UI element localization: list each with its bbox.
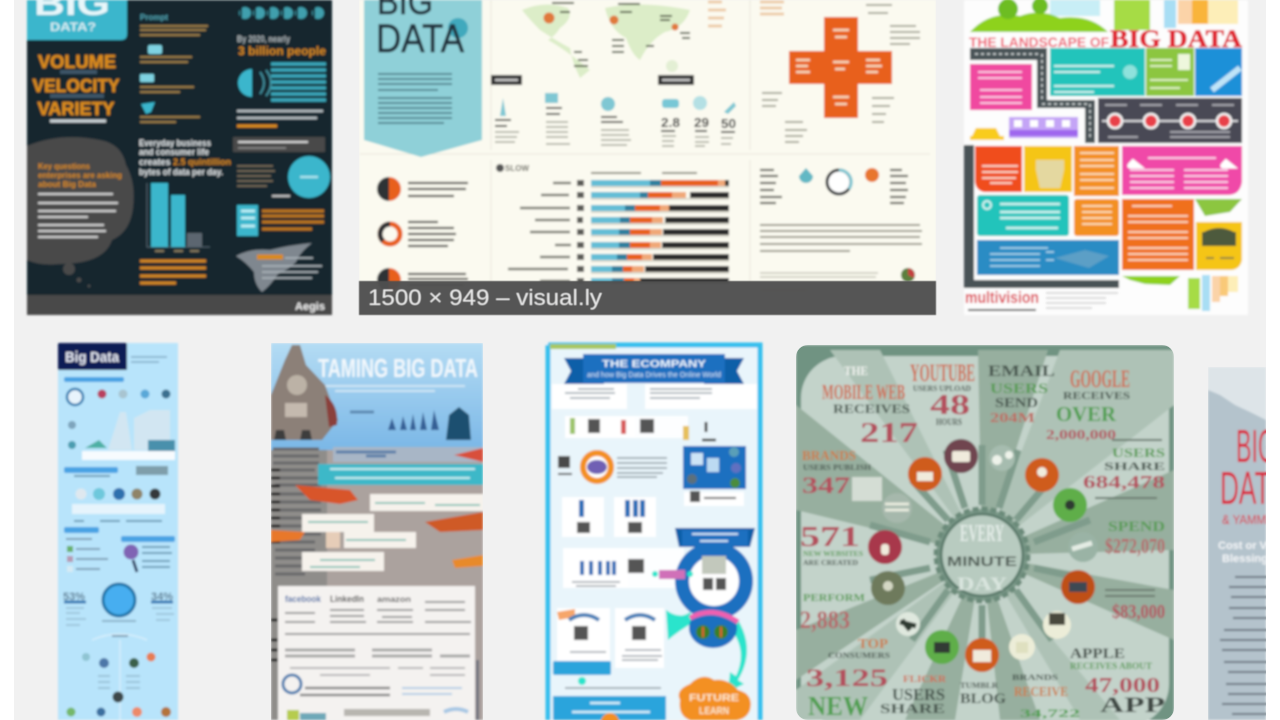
- text block: [760, 225, 922, 290]
- left statistics: USERS PUBLISH: [803, 463, 872, 472]
- orange cloud: future learn: FUTURE: [689, 693, 739, 704]
- circular icons around centre: [852, 439, 1098, 672]
- top statistics: SEND: [995, 396, 1038, 411]
- blue buttons: [553, 661, 666, 720]
- caption bar: image size and source: [359, 281, 936, 315]
- subtitle: [1218, 540, 1266, 566]
- thumbnail: cream Big Data infographic: [360, 0, 935, 282]
- column: sources list: [140, 13, 208, 122]
- teal banner: Big Data: DATA: [376, 17, 464, 61]
- network diagram: [66, 634, 171, 720]
- left statistics: 2,883: [800, 607, 850, 634]
- teal banner: Big Data: [364, 0, 482, 157]
- logo and credits: multivision: [965, 288, 1039, 307]
- centre badge: every minute of the day: DAY: [957, 574, 1007, 595]
- left statistics: CONSUMERS: [828, 651, 891, 660]
- server icon and text: [237, 205, 324, 236]
- top statistics: MOBILE WEB: [822, 380, 905, 404]
- header badge: Big Data: [27, 0, 127, 40]
- timeline panel with red circles: [1098, 98, 1242, 143]
- text column: [1219, 574, 1266, 716]
- lower coloured panels: [975, 146, 1242, 275]
- centre badge: every minute of the day: [936, 509, 1028, 601]
- bottom skyline: [1122, 275, 1238, 311]
- cloud panel: key questions: about Big Data: [38, 179, 96, 189]
- donut diagram: [760, 168, 908, 203]
- right statistics: $272,070: [1105, 534, 1165, 558]
- thumbnail: dark Big Data infographic: [27, 0, 332, 315]
- text: orange summary: [140, 261, 206, 283]
- navy header: Big Data: Big Data: [65, 349, 120, 366]
- right statistics: USERS: [1112, 445, 1165, 460]
- white data panel: facebook: [285, 594, 322, 604]
- thumbnail: The Landscape of Big Data: [964, 0, 1248, 315]
- teal arrows and binoculars: [666, 608, 747, 692]
- text: 2.5 quintillion bytes: [139, 138, 231, 177]
- left statistics: 347: [802, 473, 850, 498]
- title: Taming Big Data: [318, 353, 478, 391]
- grey callout bar: [233, 137, 325, 152]
- blue ring and devices: [652, 549, 746, 613]
- right statistics: $83,000: [1112, 601, 1165, 623]
- result cards: [557, 608, 664, 668]
- right statistics: 684,478: [1083, 472, 1165, 492]
- footer bar: Aegis: Aegis: [295, 301, 325, 313]
- stacked bar chart: [496, 164, 729, 281]
- white data panel: [278, 586, 479, 720]
- caption bar: image size and source: 1500 × 949 – visual.ly: [368, 285, 602, 310]
- title: The Landscape of Big Data: THE LANDSCAPE OF: [969, 34, 1109, 50]
- right statistics: 47,000: [1085, 673, 1160, 697]
- right statistics: RECEIVES ABOUT: [1070, 661, 1152, 671]
- white data panel: LinkedIn: [330, 594, 364, 604]
- black section tags: [491, 75, 694, 85]
- footer bar: Aegis: [27, 295, 332, 315]
- thumbnail: partly visible Big Data infographic: [1208, 367, 1266, 720]
- taxi and bus: [970, 117, 1078, 140]
- navy header: Big Data: [58, 343, 167, 370]
- right statistics: [1070, 440, 1165, 717]
- icons row with numbers: 50: [721, 116, 736, 131]
- heading: volume velocity variety: VARIETY: [38, 99, 114, 119]
- text: 2.5 quintillion bytes: creates 2.5 quintillion: [139, 157, 231, 167]
- bottom statistics: USERS: [892, 685, 945, 704]
- left statistics: TOP: [858, 637, 888, 652]
- right statistics: SPEND: [1108, 519, 1165, 535]
- left statistics: [800, 449, 891, 720]
- cloud panel: key questions: Key questions: [38, 161, 90, 171]
- text: 3 billion people: [237, 34, 326, 58]
- text: 2.5 quintillion bytes: Everyday business: [139, 138, 211, 148]
- world map: [522, 3, 690, 78]
- top statistics: GOOGLE: [1070, 366, 1130, 393]
- road: [964, 48, 1119, 288]
- top statistics: 2,000,000: [1046, 428, 1116, 443]
- map: North America: [236, 243, 322, 292]
- evolution silhouettes: [350, 407, 471, 440]
- top statistics: EMAIL: [988, 363, 1055, 380]
- text: 2.5 quintillion bytes: and consumer life: [139, 147, 209, 157]
- heading: volume velocity variety: VELOCITY: [32, 76, 120, 96]
- left statistics: PERFORM: [803, 593, 866, 604]
- right statistics: APP: [1100, 692, 1165, 717]
- centre badge: every minute of the day: EVERY: [960, 521, 1004, 547]
- centre badge: every minute of the day: MINUTE: [947, 553, 1017, 569]
- cloud panel: key questions: [27, 137, 134, 288]
- bottom statistics: SHARE: [880, 702, 945, 717]
- bottom statistics: 34,722: [1020, 706, 1080, 720]
- orange cloud: future learn: [679, 677, 751, 720]
- title: Big Data in red: [1220, 428, 1266, 525]
- orange cross diagram: [708, 2, 920, 142]
- top statistics: 217: [860, 418, 918, 449]
- subtitle: Blessing: [1222, 553, 1268, 565]
- icons row with numbers: 2.8: [661, 115, 680, 130]
- orange cloud: future learn: LEARN: [699, 706, 729, 717]
- row of logos: [72, 466, 168, 521]
- left statistics: 3,125: [806, 665, 888, 692]
- left statistics: 571: [800, 521, 860, 553]
- icons row: people: [239, 5, 324, 21]
- top statistics: RECEIVES: [1063, 390, 1130, 402]
- top statistics: THE: [844, 363, 868, 378]
- text: 2.5 quintillion bytes: bytes of data per day.: [139, 167, 223, 177]
- top statistics: OVER: [1056, 402, 1117, 426]
- bottom statistics: BRANDS: [1012, 673, 1059, 682]
- teal band: [318, 464, 483, 485]
- wifi stripes graphic: [238, 64, 326, 100]
- heading: volume velocity variety: [32, 52, 120, 121]
- orange brain circle: [558, 453, 667, 481]
- bottom statistics: TUMBLR: [960, 681, 998, 690]
- thumbnail: Every Minute of the Day: [796, 345, 1174, 720]
- gorilla figure: [271, 345, 338, 440]
- top statistics: 204M: [990, 411, 1035, 426]
- bottom statistics: FLICKR: [903, 674, 947, 684]
- icon row: [67, 389, 170, 449]
- text: mobile: [237, 111, 323, 126]
- right statistics: APPLE: [1070, 646, 1125, 662]
- ribbon title: THE ECOMPANY: [602, 359, 706, 370]
- radial panel with rays: [796, 350, 1174, 720]
- bottom statistics: [880, 673, 1080, 720]
- circle chart: [237, 156, 330, 198]
- bar chart cards: [562, 497, 684, 588]
- top statistics: USERS UPLOAD: [913, 384, 971, 393]
- white labels with red planes: [271, 448, 483, 571]
- ribbon title: and how Big Data Drives the Online World: [587, 372, 721, 379]
- icons row with numbers: 29: [694, 115, 709, 130]
- bottom statistics: RECEIVE: [1014, 685, 1068, 700]
- white data panel: amazon: [377, 595, 411, 604]
- top statistics: [822, 360, 1130, 449]
- text: 3 billion people: By 2020, nearly: [237, 34, 290, 44]
- thumbnail: pale blue Big Data infographic: [58, 343, 178, 720]
- logo and credits: [965, 288, 1118, 310]
- statistics and ring: 34%: [151, 591, 173, 603]
- ring charts left column: [377, 177, 468, 292]
- left statistics: ARE CREATED: [803, 559, 858, 567]
- people and counts row: [565, 416, 716, 440]
- heading: volume velocity variety: VOLUME: [38, 52, 116, 72]
- bar chart: [147, 183, 210, 251]
- title: The Landscape of Big Data: [969, 26, 1242, 53]
- right statistics: SHARE: [1104, 459, 1165, 473]
- thumbnail: Taming Big Data: [271, 343, 483, 720]
- stacked bar chart: SLOW: [505, 164, 529, 173]
- ribbon: connected: [675, 528, 755, 547]
- skyline tower: [271, 447, 483, 720]
- header badge: Big Data: DATA?: [50, 20, 96, 34]
- section heading bars: [64, 377, 175, 542]
- bottom statistics: BLOG: [960, 691, 1006, 707]
- blue server panel: [683, 446, 746, 506]
- cloud panel: key questions: enterprises are asking: [38, 170, 122, 180]
- left statistics: NEW WEBSITES: [803, 550, 863, 558]
- icons row with numbers: [495, 93, 736, 146]
- statistics and ring: [63, 584, 174, 625]
- top statistics: HOURS: [936, 417, 962, 427]
- text: 3 billion people: 3 billion people: [238, 44, 326, 58]
- ribbon title: [564, 354, 744, 384]
- city illustration: [82, 410, 175, 460]
- coloured panels: [970, 48, 1242, 110]
- top statistics: 48: [930, 390, 970, 421]
- statistics and ring: 53%: [63, 591, 85, 603]
- title: Taming Big Data: TAMING BIG DATA: [318, 353, 478, 383]
- city skyline and hills: [970, 0, 1238, 32]
- left statistics: BRANDS: [802, 449, 856, 464]
- thumbnail: The eCompany flowchart: [546, 343, 762, 720]
- column: sources list: Prompt: [140, 13, 168, 22]
- top statistics: RECEIVES: [833, 401, 910, 416]
- list and magnifier: [66, 539, 172, 572]
- top notes: [552, 384, 757, 409]
- top statistics: USERS: [990, 381, 1048, 397]
- title: The Landscape of Big Data: BIG DATA: [1110, 26, 1242, 53]
- top statistics: YOUTUBE: [910, 360, 975, 387]
